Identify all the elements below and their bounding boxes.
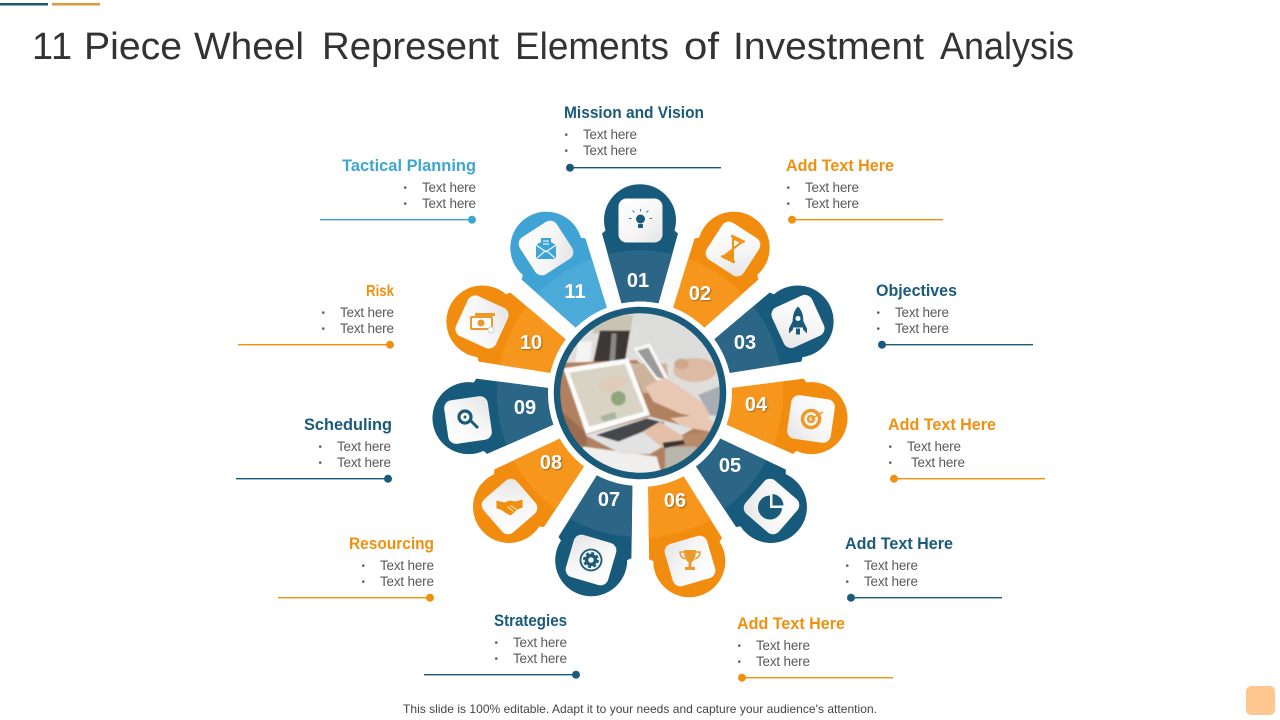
title: Investment <box>733 26 924 68</box>
wheel segment 03: 03 <box>734 332 756 354</box>
label: Objectives: Objectives <box>876 281 957 300</box>
label: Strategies: Text here <box>513 635 567 650</box>
label: Tactical Planning: • <box>404 199 408 210</box>
label: Add Text Here (06): Add Text Here <box>737 614 845 633</box>
central photo <box>550 300 730 480</box>
icon: handshake <box>478 475 541 538</box>
label: Tactical Planning: Tactical Planning <box>342 156 476 175</box>
icon: hourglass <box>703 219 763 279</box>
label: Strategies: • <box>494 654 498 665</box>
label: Scheduling <box>236 415 392 483</box>
icon: target <box>786 394 836 444</box>
icon: envelope <box>516 218 576 278</box>
label: Risk: • <box>322 308 326 319</box>
icon: gear <box>564 533 618 587</box>
label: Scheduling: • <box>318 458 322 469</box>
label: Scheduling: Text here <box>337 439 391 454</box>
label: Resourcing: Resourcing <box>349 534 434 553</box>
label: Strategies <box>424 611 580 679</box>
label: Tactical Planning: Text here <box>422 196 476 211</box>
wheel segment 11 <box>495 197 623 338</box>
label: Risk: Text here <box>340 321 394 336</box>
wheel segment 01 <box>602 184 678 303</box>
wheel segment 02: 02 <box>689 283 711 305</box>
label: Strategies: Text here <box>513 651 567 666</box>
label: Add Text Here (02): Add Text Here <box>786 156 894 175</box>
label: Objectives <box>876 281 1033 349</box>
label: Add Text Here (02): • <box>786 199 790 210</box>
label: Resourcing: Text here <box>380 574 434 589</box>
label: Tactical Planning: • <box>404 183 408 194</box>
label: Add Text Here (04): Text here <box>907 439 961 454</box>
label: Risk <box>238 283 394 349</box>
label: Mission and Vision <box>564 103 721 172</box>
label: Add Text Here (04): Add Text Here <box>888 415 996 434</box>
label: Add Text Here (05): Add Text Here <box>845 534 953 553</box>
wheel segment 01: 01 <box>627 270 649 292</box>
title: Represent <box>322 26 499 68</box>
label: Risk: Risk <box>366 283 394 300</box>
label: Resourcing: • <box>362 577 366 588</box>
footer note: This slide is 100% editable. Adapt it to your needs and capture your audience's attention. <box>403 702 877 716</box>
icon: light bulb <box>618 198 662 242</box>
wheel segment 06 <box>629 471 736 607</box>
icon: trophy <box>663 534 717 588</box>
label: Add Text Here (04): • <box>888 442 892 453</box>
label: Strategies: Strategies <box>494 611 567 630</box>
label: Risk: Text here <box>340 305 394 320</box>
label: Resourcing: Text here <box>380 558 434 573</box>
label: Add Text Here (05) <box>845 534 1002 602</box>
label: Strategies: • <box>494 638 498 649</box>
label: Objectives: Text here <box>895 305 949 320</box>
top accent bars <box>0 3 100 6</box>
wheel segment 10 <box>434 272 574 391</box>
wheel segment 05: 05 <box>719 455 741 477</box>
label: Mission and Vision: Text here <box>583 143 637 158</box>
label: Mission and Vision: Mission and Vision <box>564 103 704 122</box>
wheel segment 07 <box>545 470 651 606</box>
wheel segment 03 <box>706 272 846 391</box>
label: Resourcing: • <box>362 561 366 572</box>
icon: pie chart <box>740 475 803 538</box>
label: Scheduling: Scheduling <box>304 415 392 434</box>
label: Resourcing <box>278 534 434 602</box>
label: Add Text Here (06): Text here <box>756 654 810 669</box>
label: Add Text Here (02): Text here <box>805 180 859 195</box>
icon: magnifier <box>443 395 493 445</box>
title: Analysis <box>940 26 1074 68</box>
label: Add Text Here (06) <box>737 614 893 682</box>
label: Add Text Here (02): • <box>786 183 790 194</box>
title: Elements <box>515 26 669 68</box>
title: of <box>684 26 719 68</box>
wheel segment 07: 07 <box>598 489 620 511</box>
label: Add Text Here (02): Text here <box>805 196 859 211</box>
label: Mission and Vision: • <box>564 146 568 157</box>
photo ring <box>557 310 723 476</box>
label: Add Text Here (05): • <box>846 561 850 572</box>
wheel segment 02 <box>657 197 785 338</box>
wheel segment 08: 08 <box>540 452 562 474</box>
wheel segment 09 <box>427 369 556 461</box>
label: Add Text Here (06): • <box>738 641 742 652</box>
label: Add Text Here (04) <box>888 415 1045 483</box>
label: Add Text Here (05): Text here <box>864 558 918 573</box>
corner button <box>1246 686 1275 715</box>
label: Objectives: • <box>876 324 880 335</box>
wheel segment 06: 06 <box>664 490 686 512</box>
label: Tactical Planning <box>320 156 476 224</box>
title: 11 <box>32 26 72 68</box>
label: Add Text Here (05): Text here <box>864 574 918 589</box>
wheel segment 09: 09 <box>514 397 536 419</box>
label: Add Text Here (02) <box>786 156 943 224</box>
title: Wheel <box>194 26 304 68</box>
wheel segment 05 <box>683 424 823 559</box>
wheel segment 04 <box>724 369 853 461</box>
label: Risk: • <box>322 324 326 335</box>
label: Add Text Here (04): • <box>888 458 892 469</box>
title: Piece <box>84 26 182 68</box>
icon: banknotes <box>453 293 511 351</box>
icon: rocket <box>769 292 827 351</box>
label: Mission and Vision: • <box>564 130 568 141</box>
label: Scheduling: • <box>318 442 322 453</box>
wheel segment 04: 04 <box>745 394 768 416</box>
label: Objectives: • <box>876 308 880 319</box>
label: Add Text Here (06): • <box>738 657 742 668</box>
label: Add Text Here (05): • <box>846 577 850 588</box>
label: Tactical Planning: Text here <box>422 180 476 195</box>
wheel segment 08 <box>457 424 597 559</box>
label: Add Text Here (04): Text here <box>911 455 965 470</box>
wheel segment 10: 10 <box>520 332 542 354</box>
label: Add Text Here (06): Text here <box>756 638 810 653</box>
wheel segment 11: 11 <box>564 281 586 303</box>
label: Objectives: Text here <box>895 321 949 336</box>
label: Scheduling: Text here <box>337 455 391 470</box>
label: Mission and Vision: Text here <box>583 127 637 142</box>
